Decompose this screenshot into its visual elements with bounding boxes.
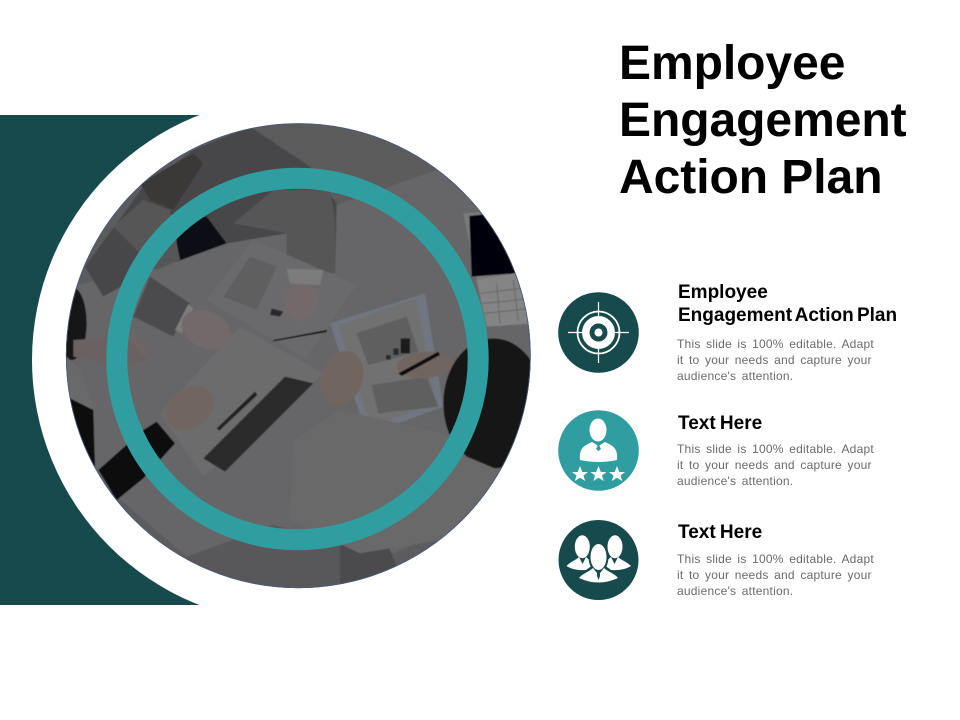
heading 1: Employee: [678, 282, 768, 303]
body 2: [677, 442, 874, 488]
title: Action Plan: [619, 151, 882, 204]
item 3: team: [558, 520, 874, 600]
body 1: it to your needs and capture your: [677, 353, 872, 367]
item 2: employee rating: [558, 410, 874, 491]
heading 2: Text Here: [678, 413, 762, 434]
body 3: [677, 552, 874, 598]
body 3: it to your needs and capture your: [677, 568, 872, 582]
title: Employee: [619, 37, 845, 90]
icon: team: [558, 520, 638, 600]
icon: target: [558, 292, 639, 373]
dark teal left band: [0, 97, 558, 623]
item 1: target: [558, 282, 897, 383]
circular meeting photo: [57, 120, 543, 600]
heading 1: Engagement Action Plan: [678, 305, 897, 326]
body 3: audience's attention.: [677, 584, 793, 598]
heading 1: [678, 282, 897, 326]
icon: employee with stars: [558, 410, 639, 491]
body 1: This slide is 100% editable. Adapt: [677, 337, 874, 351]
title: [619, 37, 907, 204]
heading 3: Text Here: [678, 522, 762, 543]
body 3: This slide is 100% editable. Adapt: [677, 552, 874, 566]
teal ring: [117, 178, 478, 540]
body 2: audience's attention.: [677, 474, 793, 488]
title: Engagement: [619, 94, 907, 147]
body 1: audience's attention.: [677, 369, 793, 383]
body 1: [677, 337, 874, 383]
body 2: it to your needs and capture your: [677, 458, 872, 472]
body 2: This slide is 100% editable. Adapt: [677, 442, 874, 456]
